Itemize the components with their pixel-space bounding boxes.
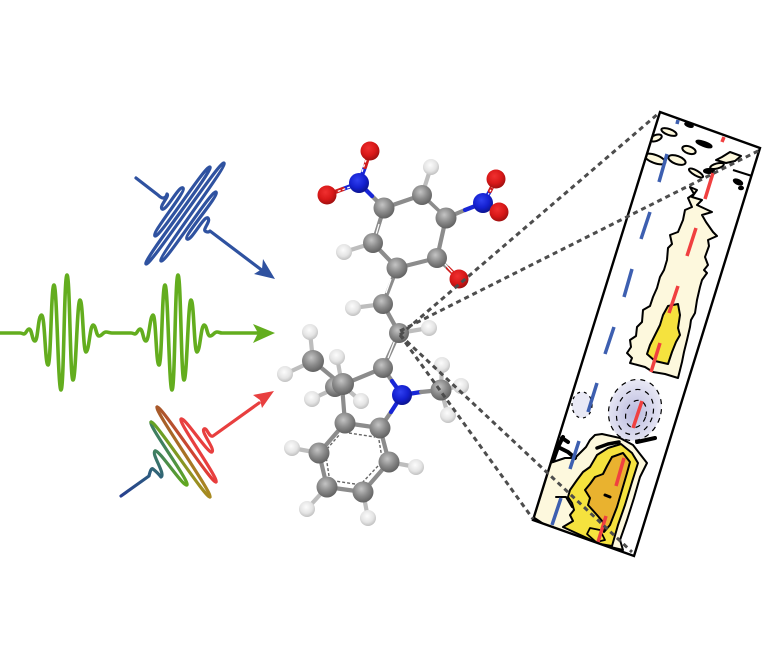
lower lobe orange core xyxy=(585,453,630,532)
molecule xyxy=(277,142,508,526)
lower fringe xyxy=(587,528,605,542)
aromatic ring dashes xyxy=(326,433,382,484)
dotted zoom lines xyxy=(400,113,760,552)
lower lobe cream contour xyxy=(533,434,647,550)
upper plume core xyxy=(647,304,680,364)
lower lobe yellow contour xyxy=(563,444,638,546)
spectrogram panel xyxy=(533,112,760,556)
upper plume contour xyxy=(627,187,717,378)
blue pump pulse with arrow xyxy=(136,163,275,279)
small negative lobe xyxy=(572,392,592,418)
molecule bonds xyxy=(285,151,499,518)
top noise contours xyxy=(643,122,752,189)
blue dashed trace xyxy=(552,120,678,525)
purple negative lobe xyxy=(608,379,662,441)
infographic scene xyxy=(0,110,762,558)
double bond highlights xyxy=(336,160,493,358)
panel border xyxy=(533,112,760,556)
red dashed trace xyxy=(598,137,724,542)
thick contour fragments xyxy=(553,437,655,507)
green double pulse with arrow xyxy=(0,275,275,390)
chirped probe pulse with arrow xyxy=(121,391,274,497)
atoms xyxy=(277,142,508,526)
contour map xyxy=(533,122,752,550)
